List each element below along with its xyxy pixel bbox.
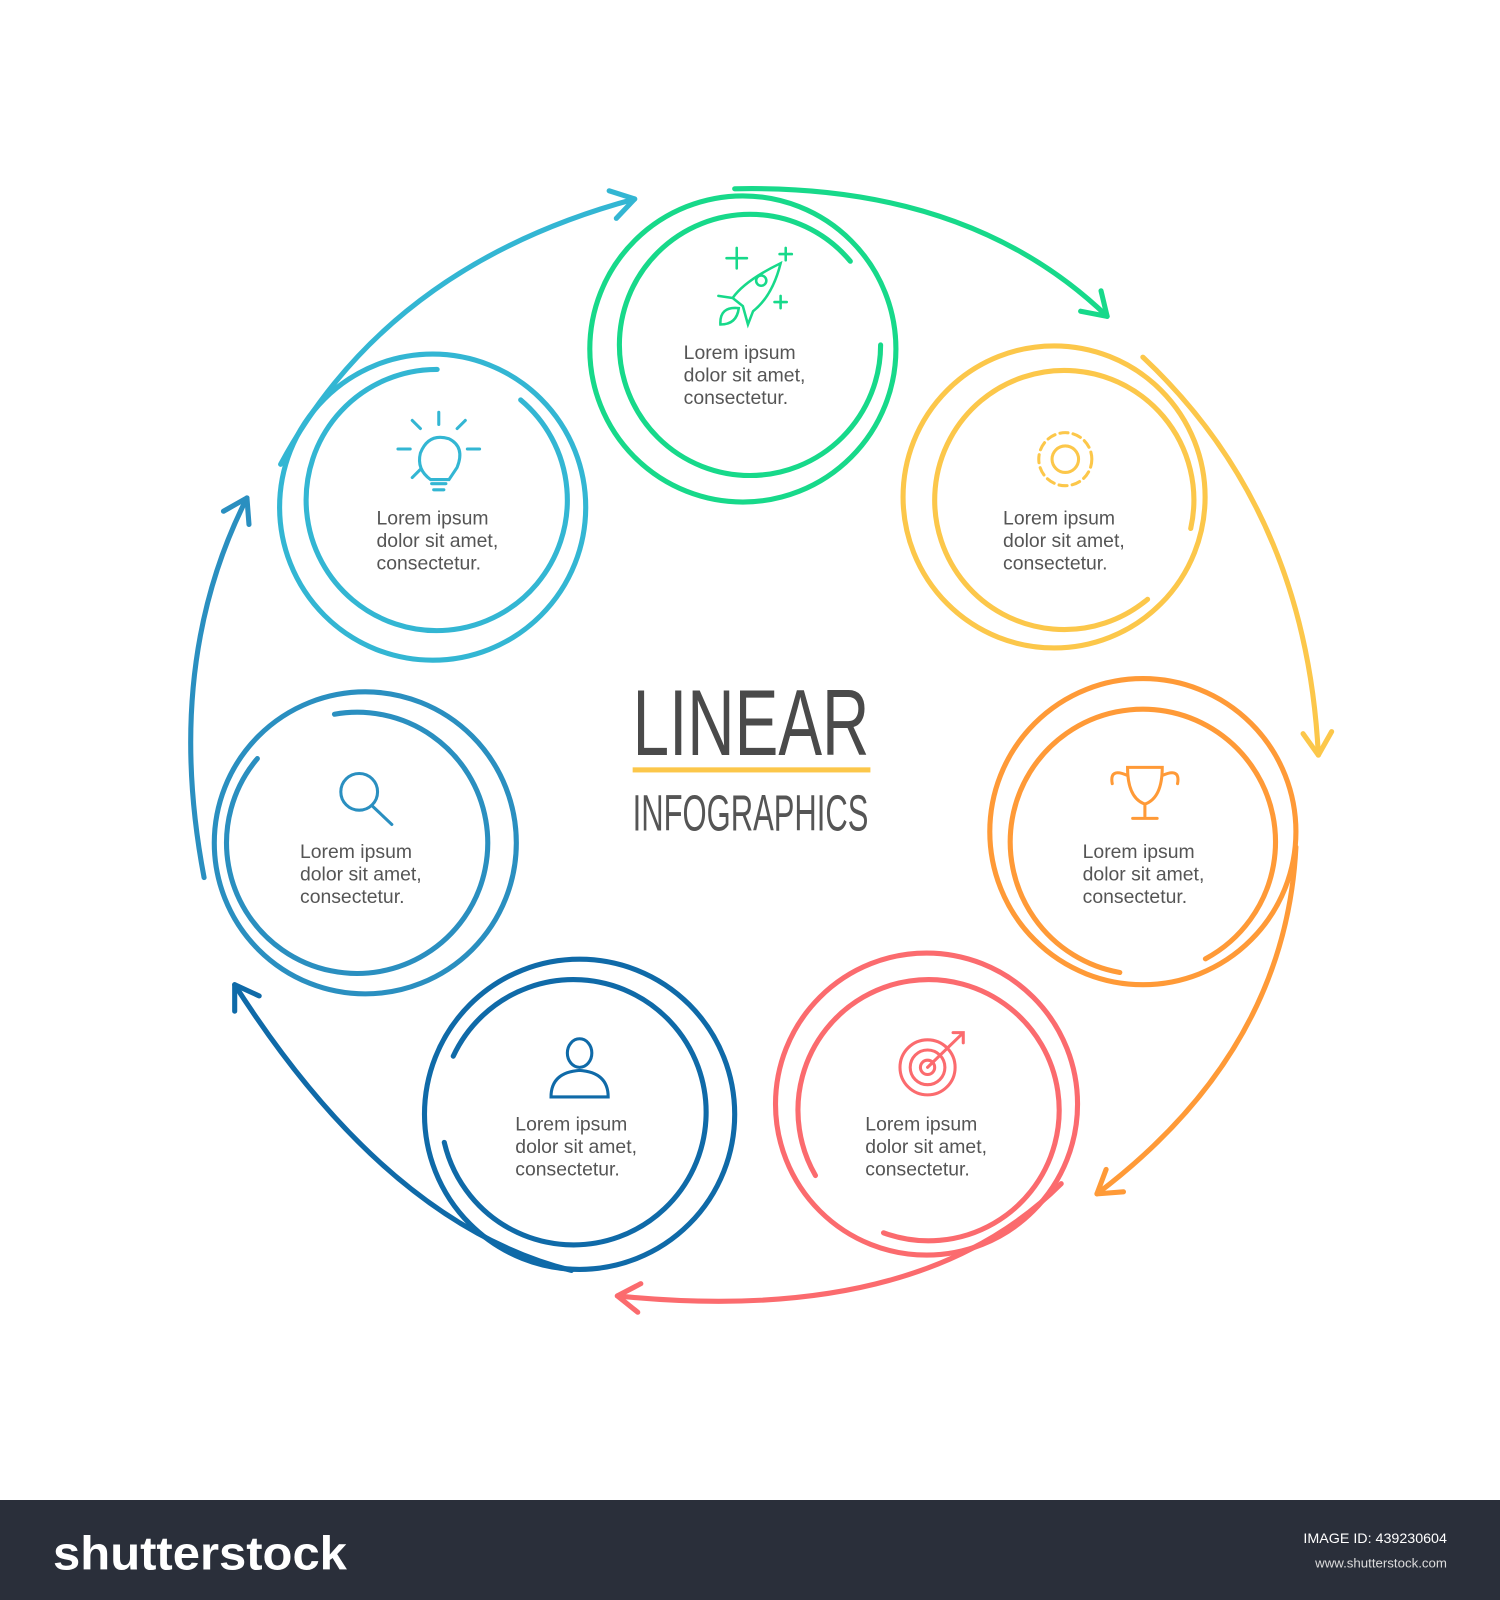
step: mid blue magnifier: dolor sit amet, [300,864,422,886]
step: green rocket: dolor sit amet, [684,365,805,387]
arrows ring [191,189,1332,1312]
step: red target: consectetur. [865,1159,970,1181]
step: orange trophy: Lorem ipsum [1083,841,1195,863]
footer bar: IMAGE ID: 439230604 [1303,1531,1447,1547]
step: orange trophy: consectetur. [1083,886,1187,908]
footer bar: www.shutterstock.com [1314,1555,1447,1570]
step: dark blue person: Lorem ipsum [515,1114,627,1136]
icon: target [900,1033,963,1095]
icon: person [551,1039,608,1097]
step: red target: dolor sit amet, [865,1136,987,1158]
step: mid blue magnifier: Lorem ipsum [300,841,412,863]
step: cyan bulb: Lorem ipsum [377,507,489,529]
step: yellow gear: dolor sit amet, [1003,530,1125,552]
footer bar [0,1500,1500,1600]
arrow: yellow to orange [1143,357,1332,755]
step: dark blue person: consectetur. [515,1159,620,1181]
footer bar: shutterstock [53,1527,348,1579]
step: mid blue magnifier: consectetur. [300,886,404,908]
step: cyan bulb: consectetur. [377,552,481,574]
icon: trophy [1112,767,1178,818]
step: green rocket: Lorem ipsum [684,342,796,364]
step: yellow gear: consectetur. [1003,552,1108,574]
arrow: green to yellow [735,189,1107,316]
step: cyan bulb [253,316,621,684]
step: mid blue magnifier [206,692,516,994]
step: red target: Lorem ipsum [865,1114,977,1136]
step: orange trophy: dolor sit amet, [1083,864,1204,886]
title [633,670,870,842]
icon: bulb [398,412,480,490]
step: yellow gear [882,317,1247,683]
arrow: cyan to green [281,191,635,464]
step: orange trophy [989,679,1297,996]
step: cyan bulb: dolor sit amet, [377,530,498,552]
step: dark blue person [397,936,750,1289]
arrow: red to dark blue [617,1184,1061,1312]
arrow: dark blue to mid blue [235,985,571,1270]
step: green rocket: consectetur. [684,387,788,409]
step: dark blue person: dolor sit amet, [515,1136,637,1158]
title: LINEAR [633,670,869,775]
icon: rocket [718,248,792,324]
step: red target [750,932,1107,1289]
arrow: orange to red [1097,847,1296,1194]
step: yellow gear: Lorem ipsum [1003,507,1115,529]
title: INFOGRAPHICS [633,785,868,842]
icon: magnifier [341,773,392,824]
icon: gear [1039,433,1092,486]
step: green rocket [590,196,896,502]
arrow: mid blue to cyan [191,498,249,878]
